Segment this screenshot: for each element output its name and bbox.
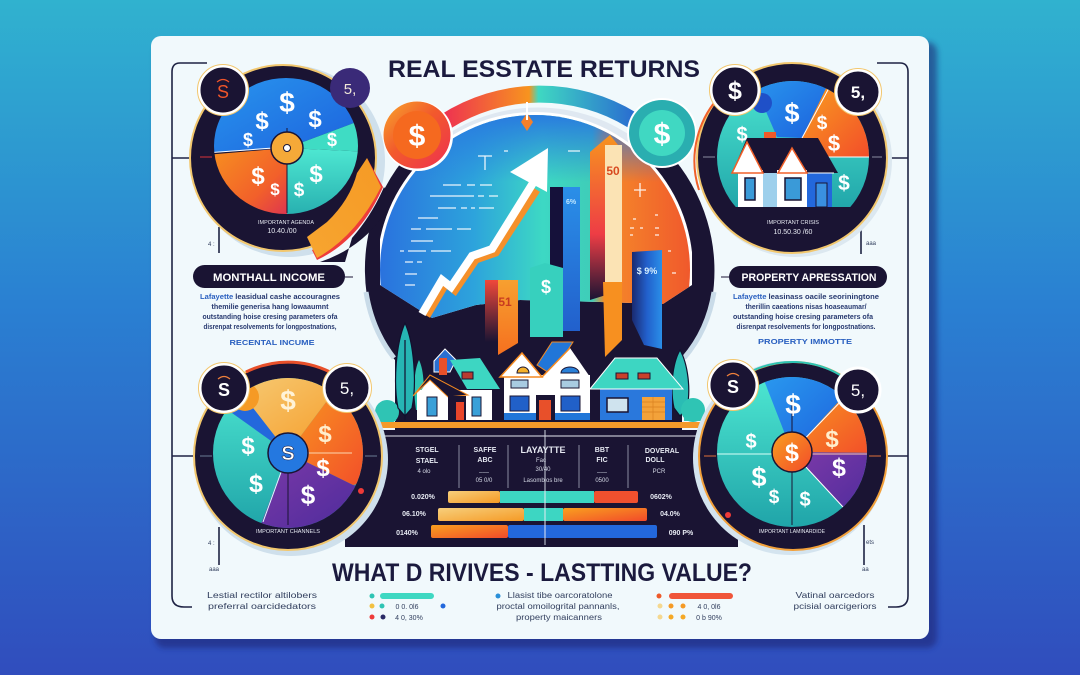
- badge: [834, 68, 882, 116]
- hub: [271, 132, 303, 164]
- table bar values: 04.0%: [660, 511, 681, 518]
- bar: teal: $: [541, 277, 551, 297]
- gauge marker: [521, 102, 533, 131]
- central dark dome: [345, 152, 738, 547]
- table bar values: 06.10%: [402, 511, 427, 518]
- pill: monthly income: MONTHALL INCOME: [213, 272, 325, 284]
- badge: 5,: [340, 379, 354, 398]
- badge: 5,: [851, 381, 865, 400]
- badge: S: [217, 82, 229, 102]
- dollar signs: $: [745, 431, 757, 453]
- text block: property appreciation: disrenpat resolvements for longpostnations.: [736, 324, 876, 331]
- dollar signs: $: [309, 161, 323, 188]
- pill: property appreciation: PROPERTY APRESSATION: [742, 272, 877, 284]
- bar: dark blue: [550, 187, 580, 331]
- caption: [767, 220, 819, 236]
- dollar signs: [745, 389, 846, 511]
- badge: $: [728, 77, 742, 105]
- panel: lower-left pie: [194, 362, 388, 556]
- hub: [268, 433, 308, 473]
- icon: teal coin: [627, 98, 697, 168]
- text block: property appreciation: outstanding hoise cresing parameters ofa: [733, 314, 873, 321]
- table column text: 4 olo: [417, 469, 431, 475]
- dollar signs: $: [751, 462, 767, 492]
- text block: monthly income: themilie generisa hang lowaaumnt: [212, 304, 329, 311]
- sky dashes: [400, 151, 676, 285]
- table column text: –––: [597, 470, 608, 476]
- dollar signs: $: [243, 130, 253, 150]
- dollar signs: $: [784, 98, 800, 128]
- hub: [772, 432, 812, 472]
- text block: bottom left: preferral oarcidedators: [208, 602, 316, 611]
- house: left: [413, 349, 500, 420]
- arrow: curved orange: [307, 158, 392, 262]
- house: right: [590, 358, 683, 420]
- caption: 10.50.30 /60: [774, 229, 813, 236]
- legend: bottom right: [656, 593, 733, 622]
- connector brackets: [172, 63, 908, 607]
- caption: IMPORTANT LAMINARDIOE: [759, 529, 825, 535]
- table column text: FIC: [596, 457, 608, 464]
- text block: property appreciation: PROPERTY IMMOTTE: [758, 339, 852, 346]
- table column text: 0500: [595, 478, 609, 484]
- dollar signs: $: [327, 130, 337, 150]
- hub: S: [281, 443, 295, 465]
- pill: monthly income: [193, 265, 353, 288]
- pill: property appreciation: [721, 266, 887, 288]
- dollar signs: $: [838, 172, 850, 195]
- dollar signs: [736, 98, 850, 195]
- panel: property appreciation pie: [694, 63, 892, 257]
- icon: house: [732, 132, 838, 207]
- icon: teal coin: $: [654, 118, 671, 151]
- badge: [198, 362, 250, 414]
- text block: property appreciation: therillin caeations nisas hoaseaumar/: [746, 304, 867, 311]
- badge: [708, 360, 758, 410]
- table column text: SAFFE: [474, 447, 497, 454]
- text block: bottom left: [207, 591, 317, 611]
- arrow: growth: [422, 148, 548, 316]
- text block: property appreciation: Lafayette leasinass oacile seoriningtone: [733, 294, 879, 301]
- caption: 10.40./00: [267, 228, 297, 235]
- dollar signs: $: [817, 113, 828, 134]
- table bars: [431, 491, 657, 538]
- dollar signs: $: [799, 489, 811, 511]
- badge: S: [218, 380, 230, 400]
- bar: tall orange: [590, 135, 622, 357]
- text block: bottom right: [794, 591, 876, 611]
- table column text: 05 0/0: [476, 478, 493, 484]
- badge: [322, 364, 372, 412]
- table column text: Lasombios bre: [523, 478, 563, 484]
- table column text: DOLL: [645, 457, 665, 464]
- dollar signs: $: [280, 385, 296, 416]
- badge: 5,: [344, 81, 356, 98]
- bar: short orange: 51: [498, 295, 512, 309]
- badge: [330, 68, 370, 108]
- houses and trees: [375, 323, 705, 424]
- comparison table: [376, 422, 705, 545]
- dollar signs: $: [316, 455, 330, 482]
- dollar signs: $: [308, 106, 322, 133]
- dollar signs: $: [241, 433, 255, 460]
- table column text: LAYAYTTE: [520, 445, 566, 455]
- table column text: –––: [479, 470, 490, 476]
- table bar values: [396, 494, 694, 537]
- bar: dark blue: 6%: [566, 199, 577, 206]
- caption: IMPORTANT AGENDA: [258, 220, 314, 226]
- bar: blue right: $ 9%: [637, 266, 657, 276]
- panel: main card: [151, 36, 937, 648]
- dollar signs: $: [251, 163, 265, 190]
- icon: orange coin: $: [409, 120, 426, 153]
- text block: property appreciation: [733, 294, 879, 346]
- hub: $: [785, 439, 799, 467]
- text block: monthly income: RECENTAL INCUME: [230, 340, 315, 347]
- small bracket tags: [208, 241, 877, 573]
- legend: bottom right: 0 b 90%: [696, 615, 722, 622]
- text block: monthly income: [200, 294, 340, 347]
- table column text: [415, 445, 680, 484]
- small bracket tags: ets: [866, 540, 874, 546]
- table bar values: 0602%: [650, 494, 673, 501]
- dollar signs: $: [255, 108, 269, 135]
- table column text: PCR: [653, 469, 666, 475]
- dollar signs: $: [249, 470, 263, 498]
- caption: IMPORTANT CRISIS: [767, 220, 819, 226]
- badge: S: [727, 377, 739, 397]
- panel: monthly income pie: [190, 60, 392, 262]
- bar: tall orange: 50: [606, 164, 620, 178]
- small bracket tags: 4 :: [208, 242, 215, 248]
- table column text: STAEL: [416, 458, 439, 465]
- text block: bottom center: [496, 591, 620, 622]
- small bracket tags: aaa: [866, 241, 877, 247]
- text block: bottom center: property maicanners: [516, 613, 602, 622]
- title: REAL ESSTATE RETURNS: [388, 56, 700, 83]
- icon: orange coin: [383, 101, 453, 171]
- dollar signs: $: [301, 480, 316, 510]
- gauge arc: [445, 94, 632, 122]
- dollar signs: $: [825, 426, 839, 453]
- table column text: DOVERAL: [645, 448, 680, 455]
- text block: bottom center: proctal omoilogrital pannanls,: [496, 602, 620, 611]
- bar chart: [422, 135, 662, 357]
- table column text: BBT: [595, 447, 610, 454]
- table column text: STGEL: [415, 447, 439, 454]
- dollar signs: $: [785, 389, 801, 420]
- legend: bottom left: 0 0. 0l6: [396, 604, 419, 611]
- text block: monthly income: outstanding hoise cresing parameters ofa: [202, 314, 338, 321]
- dollar signs: $: [769, 487, 780, 508]
- legend: bottom right: 4 0, 0l6: [698, 604, 721, 611]
- legend: bottom left: [370, 593, 446, 622]
- caption: [258, 220, 314, 235]
- small bracket tags: 4 :: [208, 541, 215, 547]
- dollar signs: $: [832, 454, 846, 482]
- bar: teal: [530, 263, 563, 337]
- dollar signs: $: [279, 87, 295, 118]
- text block: monthly income: Lafayette leasidual cashe accouragnes: [200, 294, 340, 301]
- text block: monthly income: disrenpat resolvements for longpostnations,: [204, 324, 337, 331]
- tree: left cypress: [375, 323, 424, 424]
- panel: lower-right pie: [693, 360, 887, 555]
- dollar signs: [241, 385, 332, 510]
- table column text: Fac: [536, 458, 546, 464]
- tree: right cypress: [672, 350, 705, 422]
- small bracket tags: aaa: [209, 567, 220, 573]
- table column text: 30/40: [535, 467, 551, 473]
- text block: bottom center: Llasist tibe oarcoratolone: [508, 591, 613, 600]
- heading: lasting value: WHAT D RIVIVES - LASTTING VALUE?: [332, 559, 752, 587]
- dollar signs: $: [828, 131, 840, 156]
- badge: 5,: [851, 83, 865, 102]
- dollar signs: $: [270, 180, 280, 199]
- table bar values: 0.020%: [411, 494, 436, 501]
- small bracket tags: aa: [862, 567, 869, 573]
- table bar values: 090 P%: [669, 530, 694, 537]
- dollar signs: [243, 87, 337, 201]
- chart: sky backdrop with rising arrow: [380, 108, 692, 318]
- house: center: [500, 342, 590, 420]
- table bar values: 0140%: [396, 530, 419, 537]
- bar: blue right: [632, 250, 662, 349]
- badge: [198, 64, 248, 116]
- caption: IMPORTANT CHANNELS: [256, 529, 320, 535]
- dollar signs: $: [736, 124, 748, 146]
- table column text: ABC: [477, 457, 493, 464]
- badge: [836, 368, 880, 412]
- text block: bottom right: Vatinal oarcedors: [796, 591, 874, 600]
- text block: bottom right: pcisial oarcigeriors: [794, 602, 876, 611]
- text block: bottom left: Lestial rectilor altilobers: [207, 591, 317, 600]
- badge: [710, 64, 760, 116]
- legend: bottom left: 4 0, 30%: [395, 615, 423, 622]
- bar: short orange: [485, 280, 518, 355]
- dollar signs: $: [294, 180, 305, 201]
- dollar signs: $: [318, 421, 332, 448]
